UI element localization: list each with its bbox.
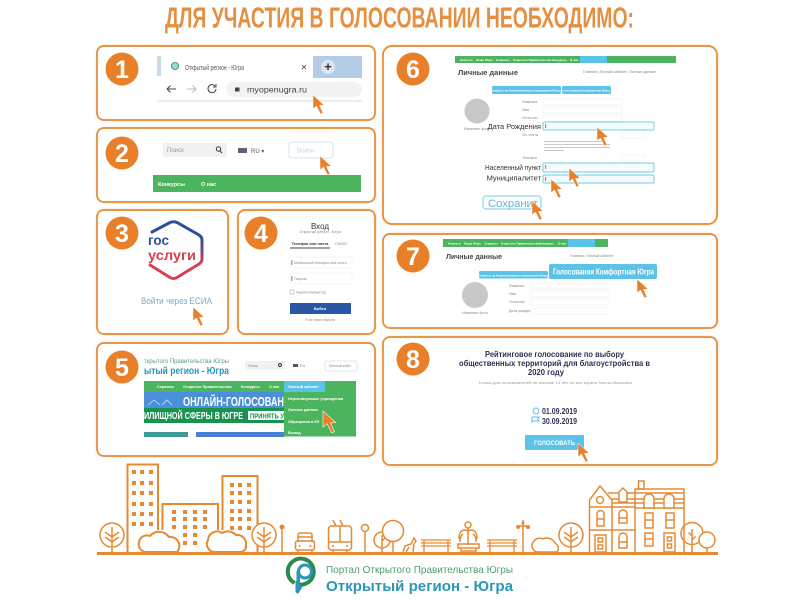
bushes xyxy=(139,531,558,552)
login form: Пароль xyxy=(294,277,307,281)
portal header: ткрытого Правительства Югры xyxy=(144,358,229,365)
voting banner xyxy=(144,392,284,423)
voting banner: ПРИНЯТЬ У xyxy=(250,412,284,420)
language selector: RU ▾ xyxy=(251,149,264,155)
badge 4: 4 xyxy=(254,220,268,248)
login form xyxy=(290,222,352,322)
panel: step 8 xyxy=(383,337,717,465)
vote button: ГОЛОСОВАТЬ xyxy=(534,441,576,447)
eligibility note: Только для пользователей не моложе 14 лет, из них пункта Ханты-Мансийск xyxy=(478,380,632,385)
green menu bar: О нас xyxy=(269,385,280,389)
portal header xyxy=(144,358,357,377)
avatar xyxy=(464,98,490,131)
tab buttons xyxy=(491,86,611,94)
nav bar: О нас xyxy=(558,242,567,246)
login form: Я не знаю пароля xyxy=(305,318,335,322)
vote button xyxy=(525,435,584,450)
portal header: RU xyxy=(300,364,306,368)
browser screenshot: Открытый регион - Югра xyxy=(185,63,245,72)
cursor xyxy=(323,411,336,433)
dog xyxy=(403,538,416,552)
form fields: Отчество xyxy=(509,300,525,304)
voting banner: ИЛИЩНОЙ СФЕРЫ В ЮГРЕ xyxy=(144,409,243,422)
tab buttons: Подпись на Нереализуемые учреждения Югры xyxy=(491,88,562,92)
avatar xyxy=(462,282,488,315)
dropdown menu: Выход xyxy=(288,431,301,435)
birth date field: Дата Рождения xyxy=(488,122,541,131)
avatar: Изменить фото xyxy=(464,127,490,131)
dropdown menu: Обращения в КП xyxy=(288,420,320,424)
gosuslugi logo: услуги xyxy=(148,247,196,263)
breadcrumb: Главная | Личный кабинет xyxy=(570,254,614,258)
nav bar: Конкурсы xyxy=(552,58,567,62)
breadcrumb: Главная | Личный кабинет | Личные данные xyxy=(583,70,656,74)
nav bar xyxy=(443,239,608,247)
panel: step 1 xyxy=(97,46,375,120)
logo mark xyxy=(288,559,314,594)
language selector xyxy=(238,148,264,155)
badge 7 xyxy=(396,240,430,272)
voting heading xyxy=(459,350,650,377)
login form: Мобильный телефон или почта xyxy=(294,261,347,265)
browser screenshot: ✕ xyxy=(301,63,307,72)
tab button: Подпись на Нереализуемые учреждения Югры xyxy=(478,274,549,278)
browser screenshot xyxy=(157,56,362,102)
settlement field: Населенный пункт xyxy=(485,163,541,172)
dropdown menu: Нереализуемые/ учреждения xyxy=(288,397,343,401)
portal header: Личный каби xyxy=(329,364,351,368)
nav bar: Наша Югра xyxy=(464,242,481,246)
badge 8: 8 xyxy=(406,346,420,374)
cursor xyxy=(578,443,589,462)
badge 5 xyxy=(106,350,138,384)
cursor xyxy=(313,95,324,114)
cursors xyxy=(532,127,608,220)
region name: Открытый регион - Югра xyxy=(326,578,514,595)
heading: personal data: Личные данные xyxy=(446,254,502,261)
badge 1 xyxy=(106,52,138,86)
start date: 01.09.2019 xyxy=(542,407,577,416)
panel: step 7 xyxy=(383,234,717,328)
fountain xyxy=(458,522,479,551)
street lamps xyxy=(280,520,530,552)
badge 3: 3 xyxy=(115,220,129,248)
highlighted voting button: Голосования Комфортная Югра xyxy=(553,268,654,276)
nav bar: Наша Югра xyxy=(476,58,493,62)
municipality field: Муниципалитет xyxy=(487,174,542,182)
save button: Сохранит xyxy=(488,198,538,210)
building: left tower xyxy=(128,464,158,552)
nav bar: Новости xyxy=(448,242,461,246)
faint form fields xyxy=(522,99,645,161)
voting banner: ОНЛАЙН-ГОЛОСОВАН xyxy=(183,394,284,409)
login via ESIA link: Войти через ЕСИА xyxy=(141,296,213,307)
dropdown menu: Личные данные xyxy=(288,408,318,412)
faint form fields: Имя xyxy=(522,108,529,112)
cursor xyxy=(320,156,331,175)
voting heading: общественных территорий для благоустройства в xyxy=(459,359,650,368)
cursor xyxy=(637,279,648,298)
panel: step 3 xyxy=(97,210,228,334)
car xyxy=(296,533,314,552)
heading: personal data: Личные данные xyxy=(458,68,518,77)
search box: Поиск xyxy=(167,148,184,154)
panel: step 5 xyxy=(97,343,375,456)
nav bar: Сервисы xyxy=(484,242,498,246)
voting heading: 2020 году xyxy=(528,368,565,377)
login form: Телефон или почта xyxy=(292,242,329,246)
faint form fields: Эл. почта xyxy=(522,133,538,137)
panel: step 2 xyxy=(97,128,375,202)
nav bar: Новости xyxy=(460,58,473,62)
portal logo xyxy=(288,559,514,595)
form fields: Имя xyxy=(509,292,516,296)
green menu bar: Сервисы xyxy=(157,385,174,389)
trees xyxy=(100,520,715,552)
green menu bar: Конкурсы xyxy=(241,385,260,389)
dropdown menu xyxy=(284,392,356,436)
lower strips xyxy=(144,432,284,437)
nav bar: Открытое Правительство xyxy=(501,242,540,246)
login button xyxy=(289,142,333,158)
green menu bar: Личный кабинет xyxy=(288,385,319,389)
panel: step 4 xyxy=(238,210,375,334)
badge 2: 2 xyxy=(115,140,129,168)
green menu bar: Открытое Правительство xyxy=(183,385,232,389)
portal header: Поиск xyxy=(248,364,258,368)
faint form fields: Телефон xyxy=(522,156,537,160)
login form: Войти xyxy=(314,306,327,311)
birth date field xyxy=(488,122,654,131)
form fields: Фамилия xyxy=(509,284,524,288)
highlighted voting button xyxy=(549,264,657,279)
townhouse xyxy=(590,481,684,552)
badge 8 xyxy=(396,342,430,376)
tab buttons: Голосования Комфортная Югра xyxy=(562,88,610,92)
login form: Чужой компьютер xyxy=(296,290,326,294)
gosuslugi logo xyxy=(148,222,202,278)
building: right tower xyxy=(222,476,258,552)
nav bar xyxy=(455,56,676,63)
gosuslugi logo: гос xyxy=(148,233,169,248)
green menu bar xyxy=(153,175,361,192)
badge 2 xyxy=(106,136,138,170)
badge 7: 7 xyxy=(406,243,420,271)
tab button xyxy=(478,271,549,278)
browser screenshot: myopenugra.ru xyxy=(247,86,307,94)
city illustration xyxy=(97,464,718,555)
end date: 30.09.2019 xyxy=(542,417,577,426)
trolleybus xyxy=(328,520,352,552)
badge 6 xyxy=(396,52,430,86)
login form: СНИЛС xyxy=(335,242,348,246)
portal header: ытый регион - Югра xyxy=(144,366,229,377)
faint form fields: Отчество xyxy=(522,116,538,120)
ground line xyxy=(97,552,718,555)
building: middle block xyxy=(162,504,218,545)
faint form fields: Фамилия xyxy=(522,100,537,104)
nav bar: Сервисы xyxy=(496,58,510,62)
browser screenshot: + xyxy=(324,59,332,74)
login form: Вход xyxy=(311,222,329,231)
green menu bar: О нас xyxy=(201,182,216,188)
badge 6: 6 xyxy=(406,56,420,84)
avatar: Изменить фото xyxy=(462,311,488,315)
cursor xyxy=(193,307,204,326)
panel: step 6 xyxy=(383,46,717,224)
settlement field xyxy=(485,163,654,172)
benches xyxy=(421,540,517,552)
green menu bar: Конкурсы xyxy=(158,182,185,188)
portal name: Портал Открытого Правительства Югры xyxy=(326,564,513,576)
municipality field xyxy=(487,174,654,183)
voting heading: Рейтинговое голосование по выбору xyxy=(485,350,625,359)
badge 5: 5 xyxy=(115,354,129,382)
nav bar: Открытое Правительство xyxy=(513,58,552,62)
form fields xyxy=(509,283,608,314)
badge 1: 1 xyxy=(115,56,129,84)
login form: Открытый регион - Югра xyxy=(299,230,341,234)
nav bar: Конкурсы xyxy=(539,242,554,246)
green menu bar xyxy=(144,381,356,392)
form fields: Дата рождения xyxy=(509,309,534,313)
login button: Войти xyxy=(297,148,314,154)
nav bar: О нас xyxy=(570,58,579,62)
search box xyxy=(163,143,227,157)
